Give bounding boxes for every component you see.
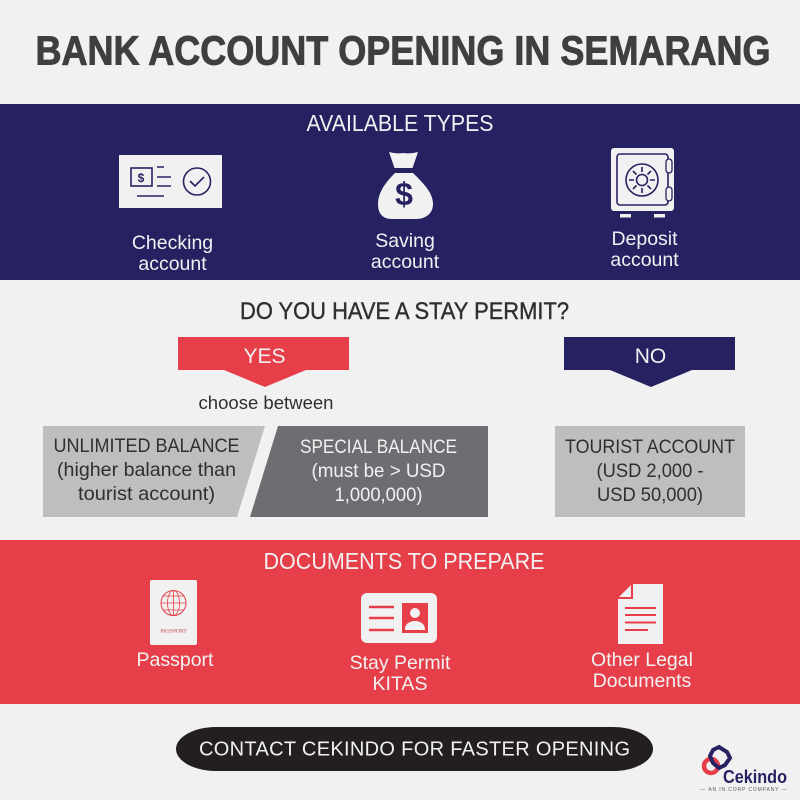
- label: stay permit kitas: Stay Permit: [350, 652, 451, 674]
- label: saving account: Saving: [375, 230, 435, 252]
- label: checking account: account: [138, 253, 207, 275]
- option: unlimited balance: tourist account): [78, 483, 215, 505]
- icon: money bag: [378, 152, 433, 219]
- no banner: NO: [635, 345, 666, 368]
- option: special balance: (must be > USD: [312, 460, 446, 482]
- logo: cekindo: — AN IN.CORP COMPANY —: [700, 787, 786, 793]
- label: deposit account: account: [610, 249, 679, 271]
- question heading: DO YOU HAVE A STAY PERMIT?: [240, 298, 569, 325]
- option: tourist account: (USD 2,000 -: [596, 460, 704, 482]
- icon: document: [618, 584, 663, 644]
- option: special balance: [250, 426, 488, 517]
- label: stay permit kitas: KITAS: [373, 673, 427, 695]
- logo: cekindo: Cekindo: [723, 767, 787, 787]
- icon: check: $: [138, 171, 145, 185]
- heading: available types: AVAILABLE TYPES: [306, 110, 494, 136]
- option: special balance: SPECIAL BALANCE: [300, 436, 457, 458]
- label: saving account: account: [371, 251, 440, 273]
- call to action pill: [176, 727, 653, 771]
- option: tourist account: [555, 426, 745, 517]
- icon: passport: [150, 580, 197, 645]
- no banner: [564, 337, 735, 387]
- logo: cekindo: [700, 747, 787, 793]
- icon: safe: [611, 148, 674, 218]
- yes banner: YES: [243, 345, 286, 368]
- option: unlimited balance: (higher balance than: [57, 459, 236, 481]
- label: other legal documents: Other Legal: [591, 649, 693, 671]
- yes banner: [178, 337, 349, 387]
- label: other legal documents: Documents: [593, 670, 692, 692]
- option: special balance: 1,000,000): [334, 484, 422, 506]
- icon: check: [119, 155, 222, 208]
- heading: documents to prepare: DOCUMENTS TO PREPARE: [264, 548, 544, 574]
- choose between text: choose between: [198, 393, 334, 413]
- option: unlimited balance: UNLIMITED BALANCE: [54, 435, 240, 457]
- label: deposit account: Deposit: [611, 228, 678, 250]
- icon: passport: PASSPORT: [160, 628, 187, 634]
- icon: money bag: $: [395, 176, 413, 212]
- label: checking account: Checking: [132, 232, 213, 254]
- option: tourist account: USD 50,000): [597, 484, 703, 506]
- option: unlimited balance: [43, 426, 265, 517]
- icon: id card: [361, 593, 437, 643]
- option: tourist account: TOURIST ACCOUNT: [565, 436, 735, 458]
- call to action pill: CONTACT CEKINDO FOR FASTER OPENING: [199, 738, 630, 760]
- panel: available types: [0, 104, 800, 280]
- panel: documents to prepare: [0, 540, 800, 704]
- label: passport: Passport: [137, 649, 214, 671]
